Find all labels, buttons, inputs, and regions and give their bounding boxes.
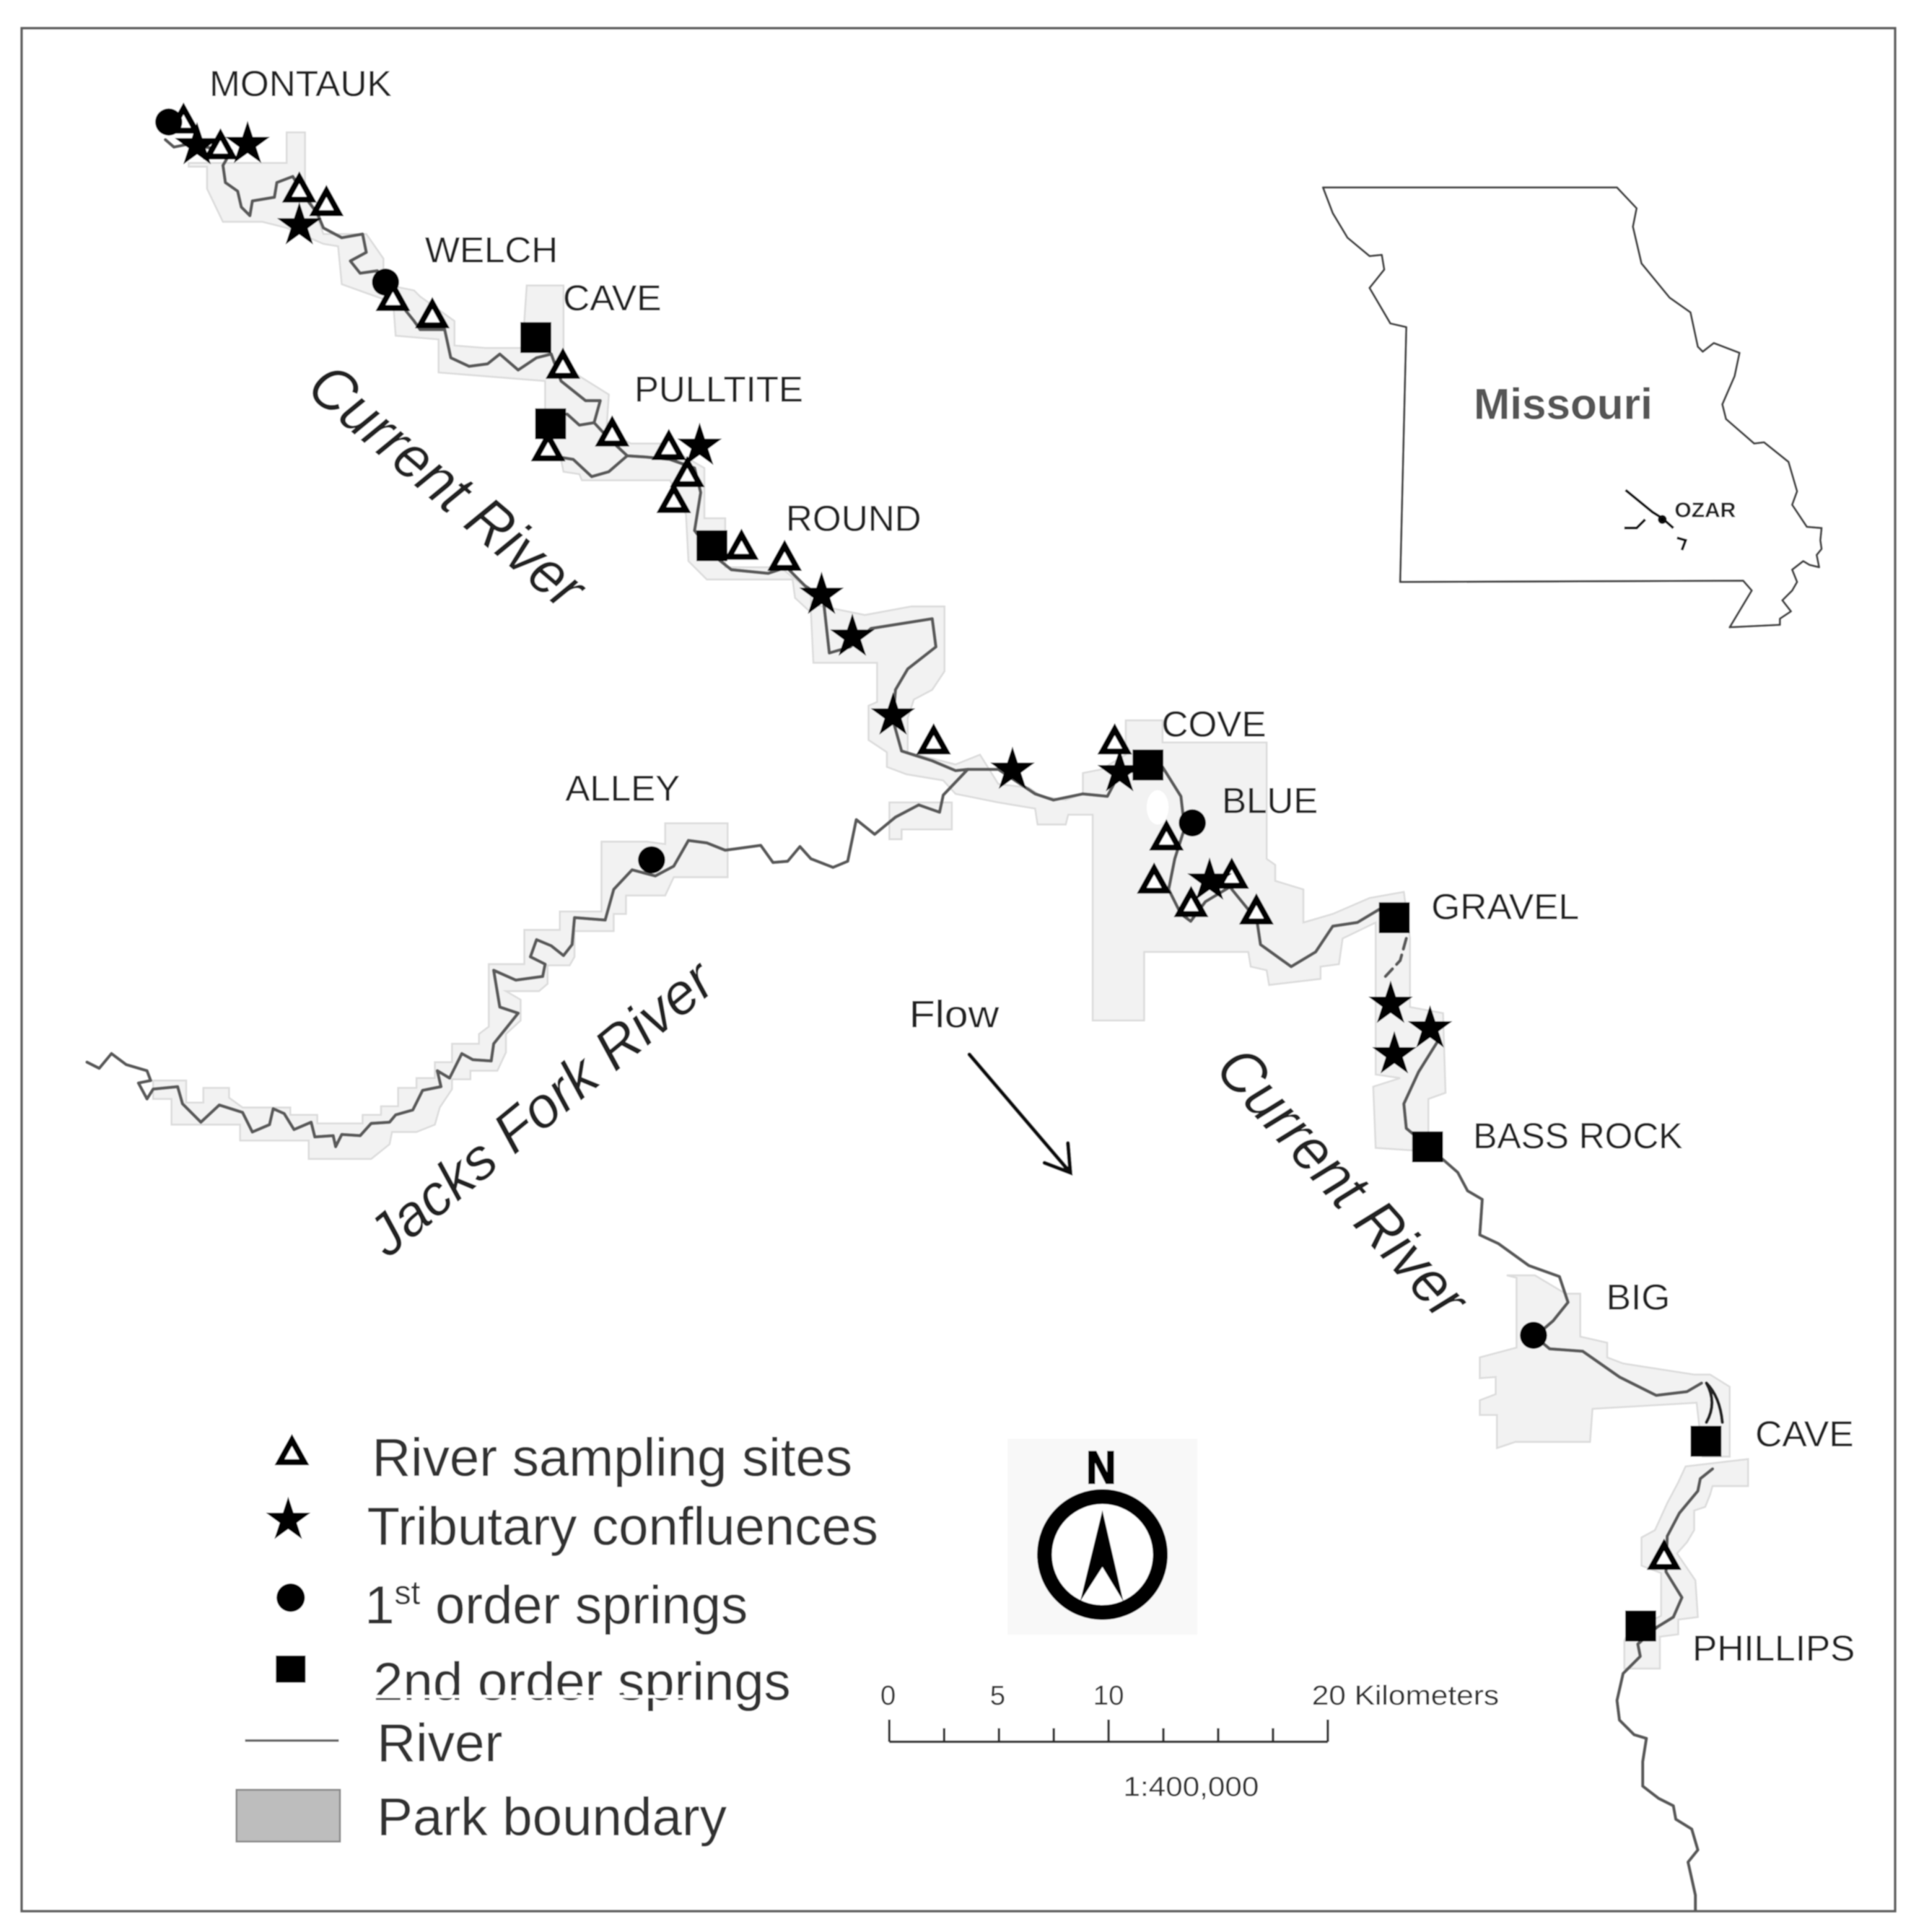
river name: lower Current River: Current River (1203, 1033, 1483, 1334)
spring name labels: GRAVEL (1431, 886, 1579, 927)
flow arrow (969, 1054, 1070, 1173)
legend: park boundary: Park boundary (377, 1787, 727, 1847)
spring name labels: ROUND (786, 498, 922, 539)
inset map: Missouri outline (1323, 188, 1822, 627)
scale bar (880, 1680, 1499, 1803)
legend (237, 1428, 878, 1847)
legend: first order springs: 1 (364, 1575, 395, 1635)
legend: second order springs: 2nd order springs (373, 1651, 791, 1711)
north arrow: N (1086, 1443, 1116, 1493)
north arrow (1007, 1439, 1197, 1635)
inset: OZAR label: OZAR (1674, 499, 1736, 522)
spring name labels (209, 63, 1855, 1669)
legend: river sampling sites: River sampling sites (372, 1428, 852, 1487)
spring name labels: BIG (1606, 1276, 1670, 1317)
scale bar: 1:400,000 (1124, 1772, 1259, 1803)
legend: tributary confluences: Tributary confluences (367, 1496, 878, 1556)
spring name labels: BASS ROCK (1473, 1115, 1682, 1156)
scale bar: 10 (1093, 1680, 1124, 1711)
legend: first order springs: st (395, 1573, 421, 1611)
spring name labels: PULLTITE (634, 368, 803, 409)
scale bar: 0 (880, 1680, 896, 1711)
spring name labels: ALLEY (565, 767, 680, 808)
spring name labels: WELCH (425, 230, 558, 271)
river name: Jacks Fork River: Jacks Fork River (354, 945, 728, 1269)
spring name labels: BLUE (1222, 780, 1318, 821)
spring name labels: PHILLIPS (1692, 1627, 1855, 1669)
scale bar: 20 Kilometers (1312, 1680, 1499, 1711)
legend: river: River (377, 1713, 502, 1773)
scale bar: 5 (990, 1680, 1005, 1711)
flow label: Flow (909, 994, 1000, 1036)
park boundary areas (153, 132, 1748, 1669)
legend: first order springs: order springs (420, 1575, 748, 1635)
inset: Missouri label: Missouri (1474, 380, 1653, 429)
Current River line (165, 140, 1723, 1910)
spring name labels: CAVE (1755, 1413, 1854, 1454)
legend: first order springs (276, 1573, 748, 1635)
markers: tributary confluences (175, 121, 1452, 1073)
river name: upper Current River: Current River (295, 350, 600, 624)
spring name labels: COVE (1161, 704, 1267, 745)
markers: second order springs (520, 322, 1721, 1641)
marker: site on top of spring at Welch (380, 286, 406, 308)
markers: river sampling sites (171, 108, 1676, 1567)
markers: first order springs (155, 108, 1547, 1349)
Jacks Fork River line (87, 769, 968, 1147)
spring name labels: MONTAUK (209, 63, 392, 104)
inset: park location mark (1624, 490, 1686, 550)
spring name labels: CAVE (563, 277, 662, 318)
